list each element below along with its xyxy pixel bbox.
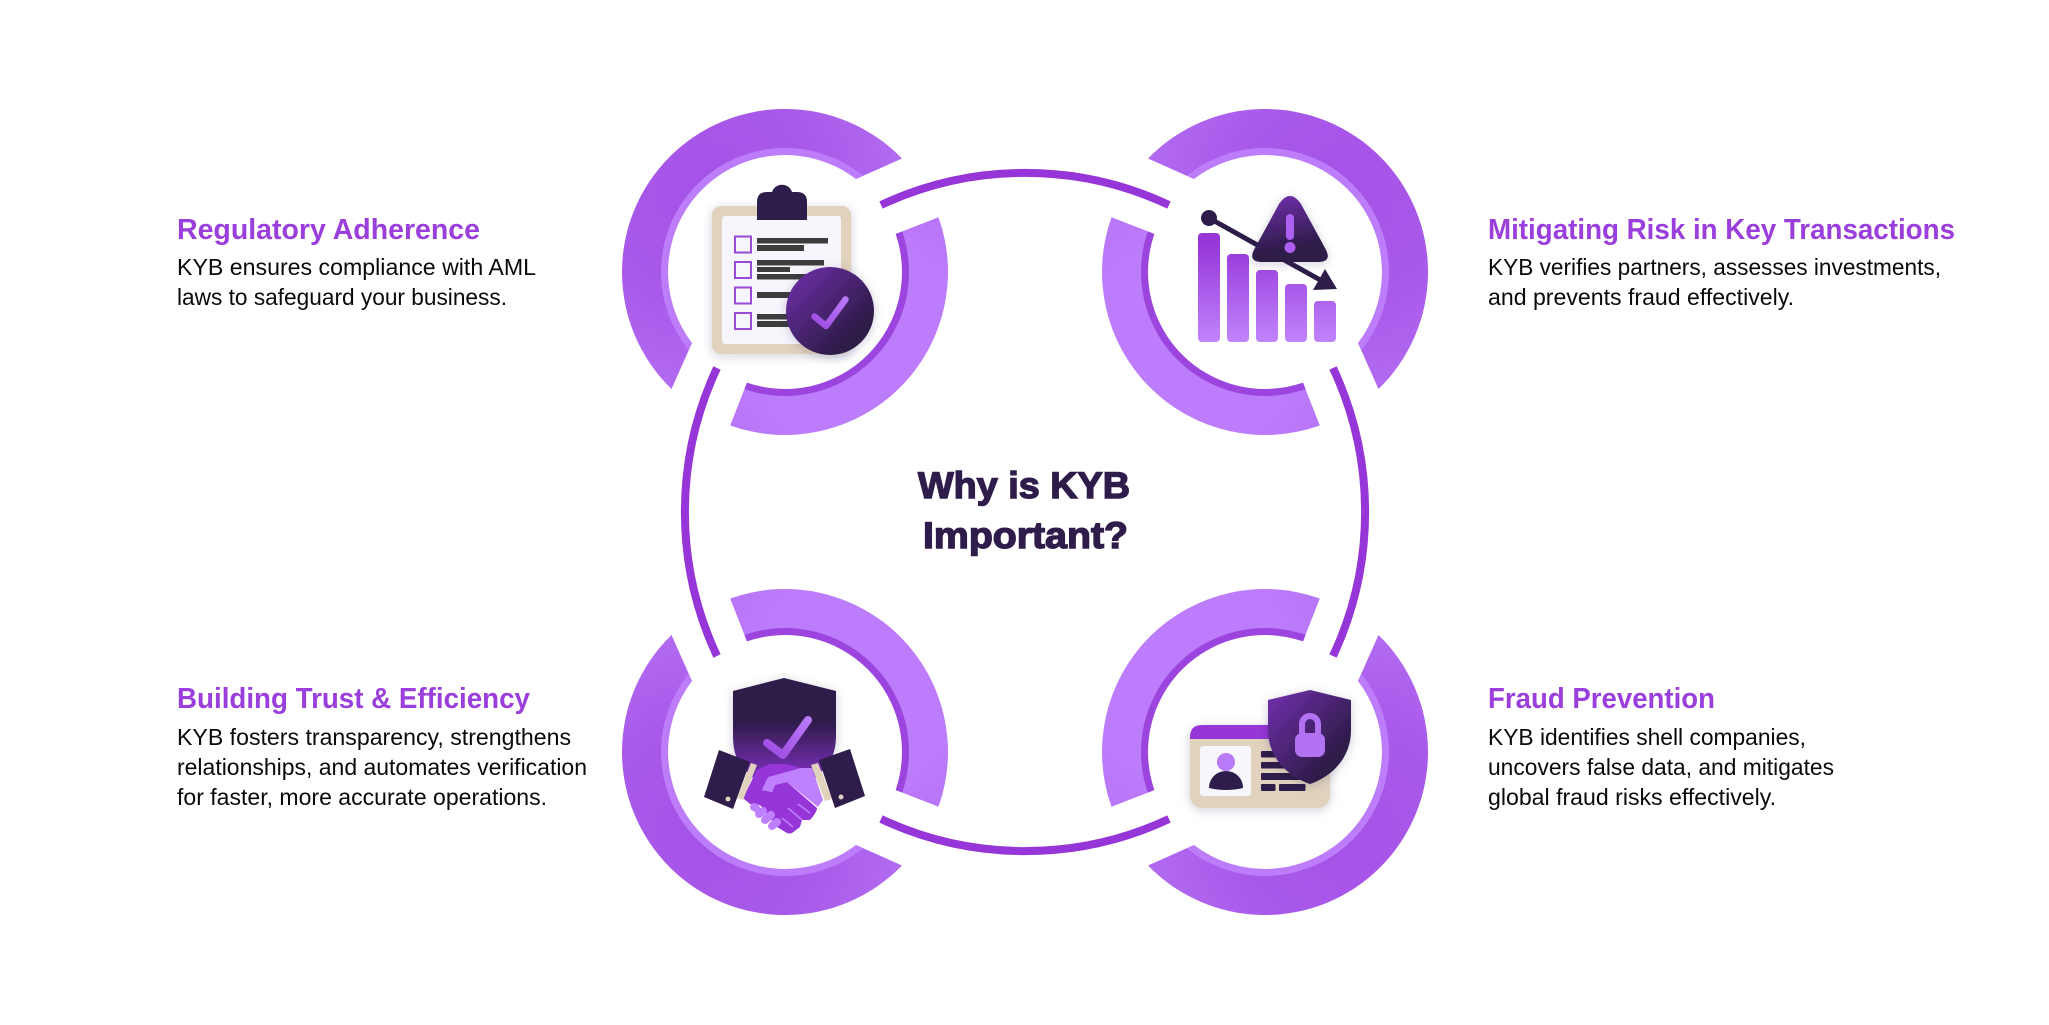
title: Why is KYB — [918, 465, 1130, 506]
donut: bottom left — [622, 589, 948, 915]
text block: Mitigating Risk in Key Transactions — [1488, 214, 1955, 310]
text block: Fraud Prevention — [1488, 683, 1834, 810]
text block: Mitigating Risk in Key Transactions: and prevents fraud effectively. — [1488, 284, 1794, 310]
icon: shield and handshake — [704, 678, 865, 834]
text block: Regulatory Adherence: laws to safeguard your business. — [177, 284, 507, 310]
donut: top right — [1102, 109, 1428, 435]
text block: Mitigating Risk in Key Transactions: KYB verifies partners, assesses investments, — [1488, 254, 1941, 280]
title: Important? — [923, 515, 1128, 556]
text block: Fraud Prevention: Fraud Prevention — [1488, 683, 1715, 715]
text block: Building Trust and Efficiency: for faster, more accurate operations. — [177, 784, 547, 810]
text block: Building Trust and Efficiency: relationships, and automates verification — [177, 754, 587, 780]
icon: clipboard with check badge — [712, 185, 874, 355]
text block: Mitigating Risk in Key Transactions: Mitigating Risk in Key Transactions — [1488, 214, 1955, 246]
text block: Regulatory Adherence: Regulatory Adherence — [177, 214, 480, 246]
donut: top left — [622, 109, 948, 435]
text block: Fraud Prevention: KYB identifies shell companies, — [1488, 724, 1806, 750]
text block: Building Trust and Efficiency: Building Trust & Efficiency — [177, 683, 530, 715]
icon: declining bar chart with warning triangle — [1198, 196, 1337, 342]
text block: Fraud Prevention: uncovers false data, and mitigates — [1488, 754, 1834, 780]
donut: bottom right — [1102, 589, 1428, 915]
big connecting ring — [685, 173, 1365, 851]
icon: ID card with lock shield — [1190, 690, 1351, 808]
text block: Regulatory Adherence — [177, 214, 536, 310]
text block: Fraud Prevention: global fraud risks effectively. — [1488, 784, 1776, 810]
title — [918, 465, 1130, 556]
text block: Building Trust and Efficiency — [177, 683, 587, 810]
text block: Building Trust and Efficiency: KYB fosters transparency, strengthens — [177, 724, 571, 750]
text block: Regulatory Adherence: KYB ensures compliance with AML — [177, 254, 536, 280]
